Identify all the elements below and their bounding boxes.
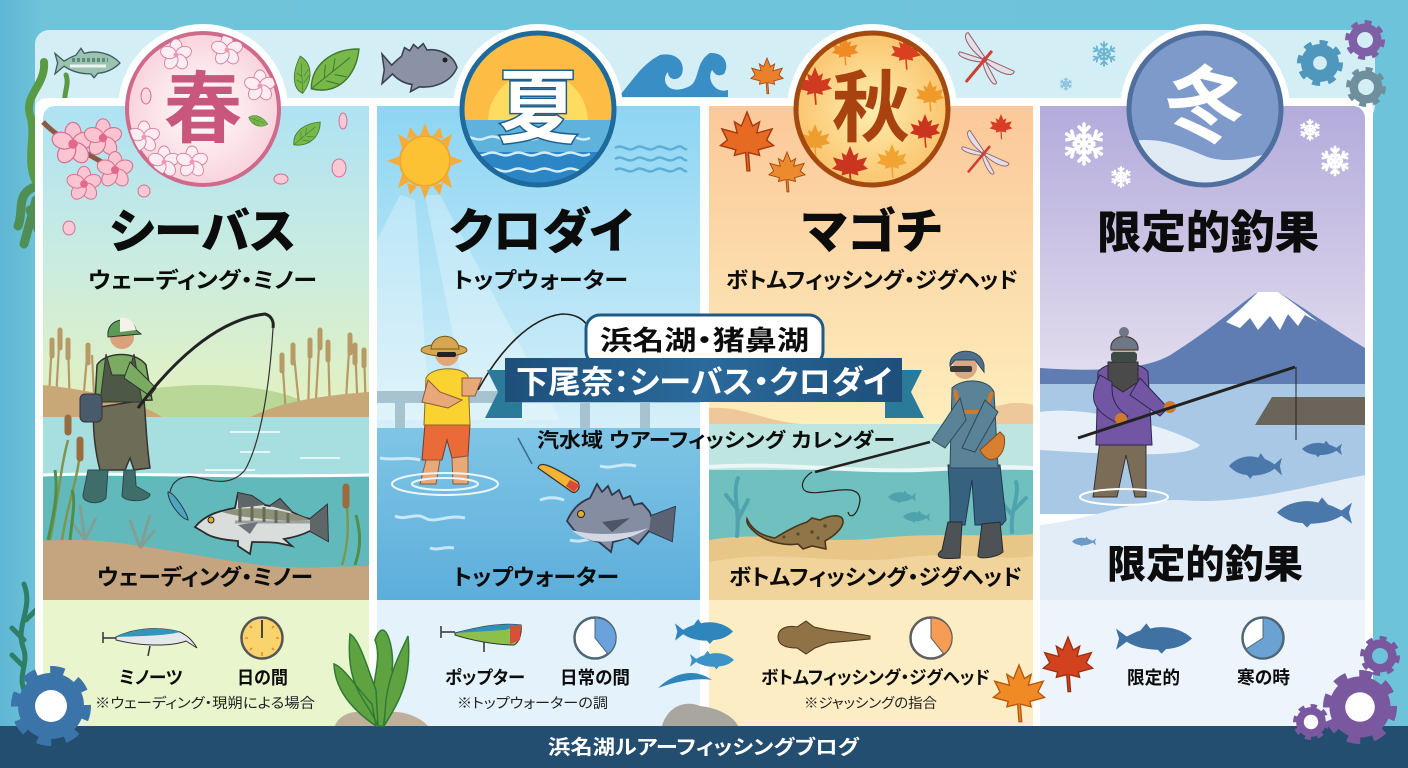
gears: top right xyxy=(1301,24,1382,104)
label: spring lure: ミノーツ xyxy=(119,668,183,688)
icon: winter fish xyxy=(1116,623,1192,654)
fish: black sea bream xyxy=(567,484,675,552)
footer xyxy=(0,726,1408,768)
icon: clock winter xyxy=(1242,618,1284,658)
footer: 浜名湖ルアーフィッシングブログ xyxy=(548,735,860,759)
label: winter scene: 限定的釣果 xyxy=(1107,544,1303,587)
reeds: spring xyxy=(48,330,366,415)
seaweed: upper left xyxy=(18,62,67,244)
decoration: snowflakes xyxy=(1060,42,1349,187)
decoration: spring leaves xyxy=(222,45,359,167)
badge: autumn: 秋 xyxy=(832,64,910,152)
fish silhouettes: winter xyxy=(1072,441,1352,547)
white frame xyxy=(35,98,1373,740)
bridge xyxy=(377,391,700,431)
small fish: autumn xyxy=(888,491,930,523)
decoration: blue fish group xyxy=(658,619,734,688)
fishing rod and line: winter xyxy=(1078,367,1296,440)
heading: summer method: トップウォーター xyxy=(453,268,628,293)
icon: minnow lure xyxy=(103,629,197,656)
panel: spring xyxy=(43,106,369,726)
illustration: winter angler xyxy=(1093,327,1176,497)
decoration: cherry blossoms xyxy=(43,113,347,235)
heading: summer species: クロダイ xyxy=(449,205,633,259)
icon: clock spring xyxy=(242,618,282,658)
label: autumn scene: ボトムフィッシング・ジグヘッド xyxy=(729,565,1022,590)
heading: spring species: シーバス xyxy=(109,206,296,259)
label: spring time: 日の間 xyxy=(237,668,288,688)
heading: spring method: ウェーディング・ミノー xyxy=(88,268,317,293)
heading: autumn method: ボトムフィッシング・ジグヘッド xyxy=(726,268,1018,293)
ripples: winter xyxy=(1080,489,1168,505)
badge: summer: 夏 xyxy=(498,64,578,153)
note: summer: ※トップウォーターの調 xyxy=(457,695,608,711)
badge: summer xyxy=(453,24,623,194)
gear: bottom left xyxy=(18,673,84,739)
decoration: bottom maple leaves xyxy=(993,637,1093,722)
decoration: top mackerel xyxy=(55,48,120,78)
icon: flathead xyxy=(778,621,870,654)
panel: summer xyxy=(377,106,700,726)
note: spring: ※ウェーディング・現朔による場合 xyxy=(95,695,315,711)
icon: clock autumn xyxy=(910,618,952,658)
sun beams xyxy=(377,195,560,420)
decoration: dragonflies xyxy=(943,32,1015,188)
note: autumn: ※ジャッシングの指合 xyxy=(804,695,937,711)
seaweed: autumn xyxy=(726,478,1026,536)
badge: winter xyxy=(1120,24,1290,194)
label: spring scene: ウェーディング・ミノー xyxy=(97,565,313,590)
label: summer time: 日常の間 xyxy=(560,668,630,688)
mountain xyxy=(1040,292,1365,384)
fishing rod and line: autumn xyxy=(802,442,930,516)
subtitle: 汽水域 ウアーフィッシング カレンダー xyxy=(537,428,895,452)
seaweed and rocks: center bottom xyxy=(334,630,738,726)
fishing rod and line: summer xyxy=(478,314,588,390)
decoration: great wave xyxy=(618,53,728,97)
seaweed: lower left xyxy=(12,584,36,690)
decoration: ripples xyxy=(615,146,687,171)
gears: bottom right xyxy=(1296,640,1396,738)
illustration: spring angler xyxy=(80,318,156,503)
fish: flathead xyxy=(747,516,843,549)
top light band xyxy=(35,30,1375,120)
rock xyxy=(1255,397,1365,425)
label: winter time: 寒の時 xyxy=(1237,668,1290,688)
cattails: spring xyxy=(48,418,360,565)
icon: popper lure xyxy=(441,624,521,652)
label: summer scene: トップウォーター xyxy=(453,565,619,590)
underwater plants: spring xyxy=(70,505,155,548)
illustration: summer angler xyxy=(420,336,482,484)
banner: lake names xyxy=(586,315,823,365)
fish: sea bass xyxy=(195,493,328,554)
heading: winter: 限定的釣果 xyxy=(1097,207,1319,258)
ribbon banner xyxy=(485,358,924,418)
ribbon banner: 下尾奈：シーバス・クロダイ xyxy=(516,364,892,400)
label: winter target: 限定的 xyxy=(1127,668,1180,688)
decoration: autumn leaves xyxy=(720,58,1012,192)
badge: autumn xyxy=(787,24,957,194)
fishing rod and line: spring xyxy=(138,314,273,492)
panel: winter xyxy=(1040,106,1365,726)
ripples: summer xyxy=(392,473,498,495)
label: summer lure: ポップター xyxy=(445,667,525,688)
badge: winter: 冬 xyxy=(1155,53,1254,158)
banner: lake names: 浜名湖・猪鼻湖 xyxy=(600,326,809,356)
label: autumn lure: ボトムフィッシング・ジグヘッド xyxy=(761,667,990,688)
decoration: sun xyxy=(387,123,463,199)
panel: autumn xyxy=(709,106,1033,726)
heading: autumn species: マゴチ xyxy=(802,205,942,259)
icon: clock summer xyxy=(574,618,616,658)
decoration: top seabream xyxy=(382,44,457,92)
badge: spring xyxy=(118,24,288,194)
illustration: autumn angler xyxy=(932,351,1006,559)
badge: spring: 春 xyxy=(164,65,242,153)
lure: summer popper xyxy=(518,438,580,493)
lure: spring minnow xyxy=(168,492,188,520)
